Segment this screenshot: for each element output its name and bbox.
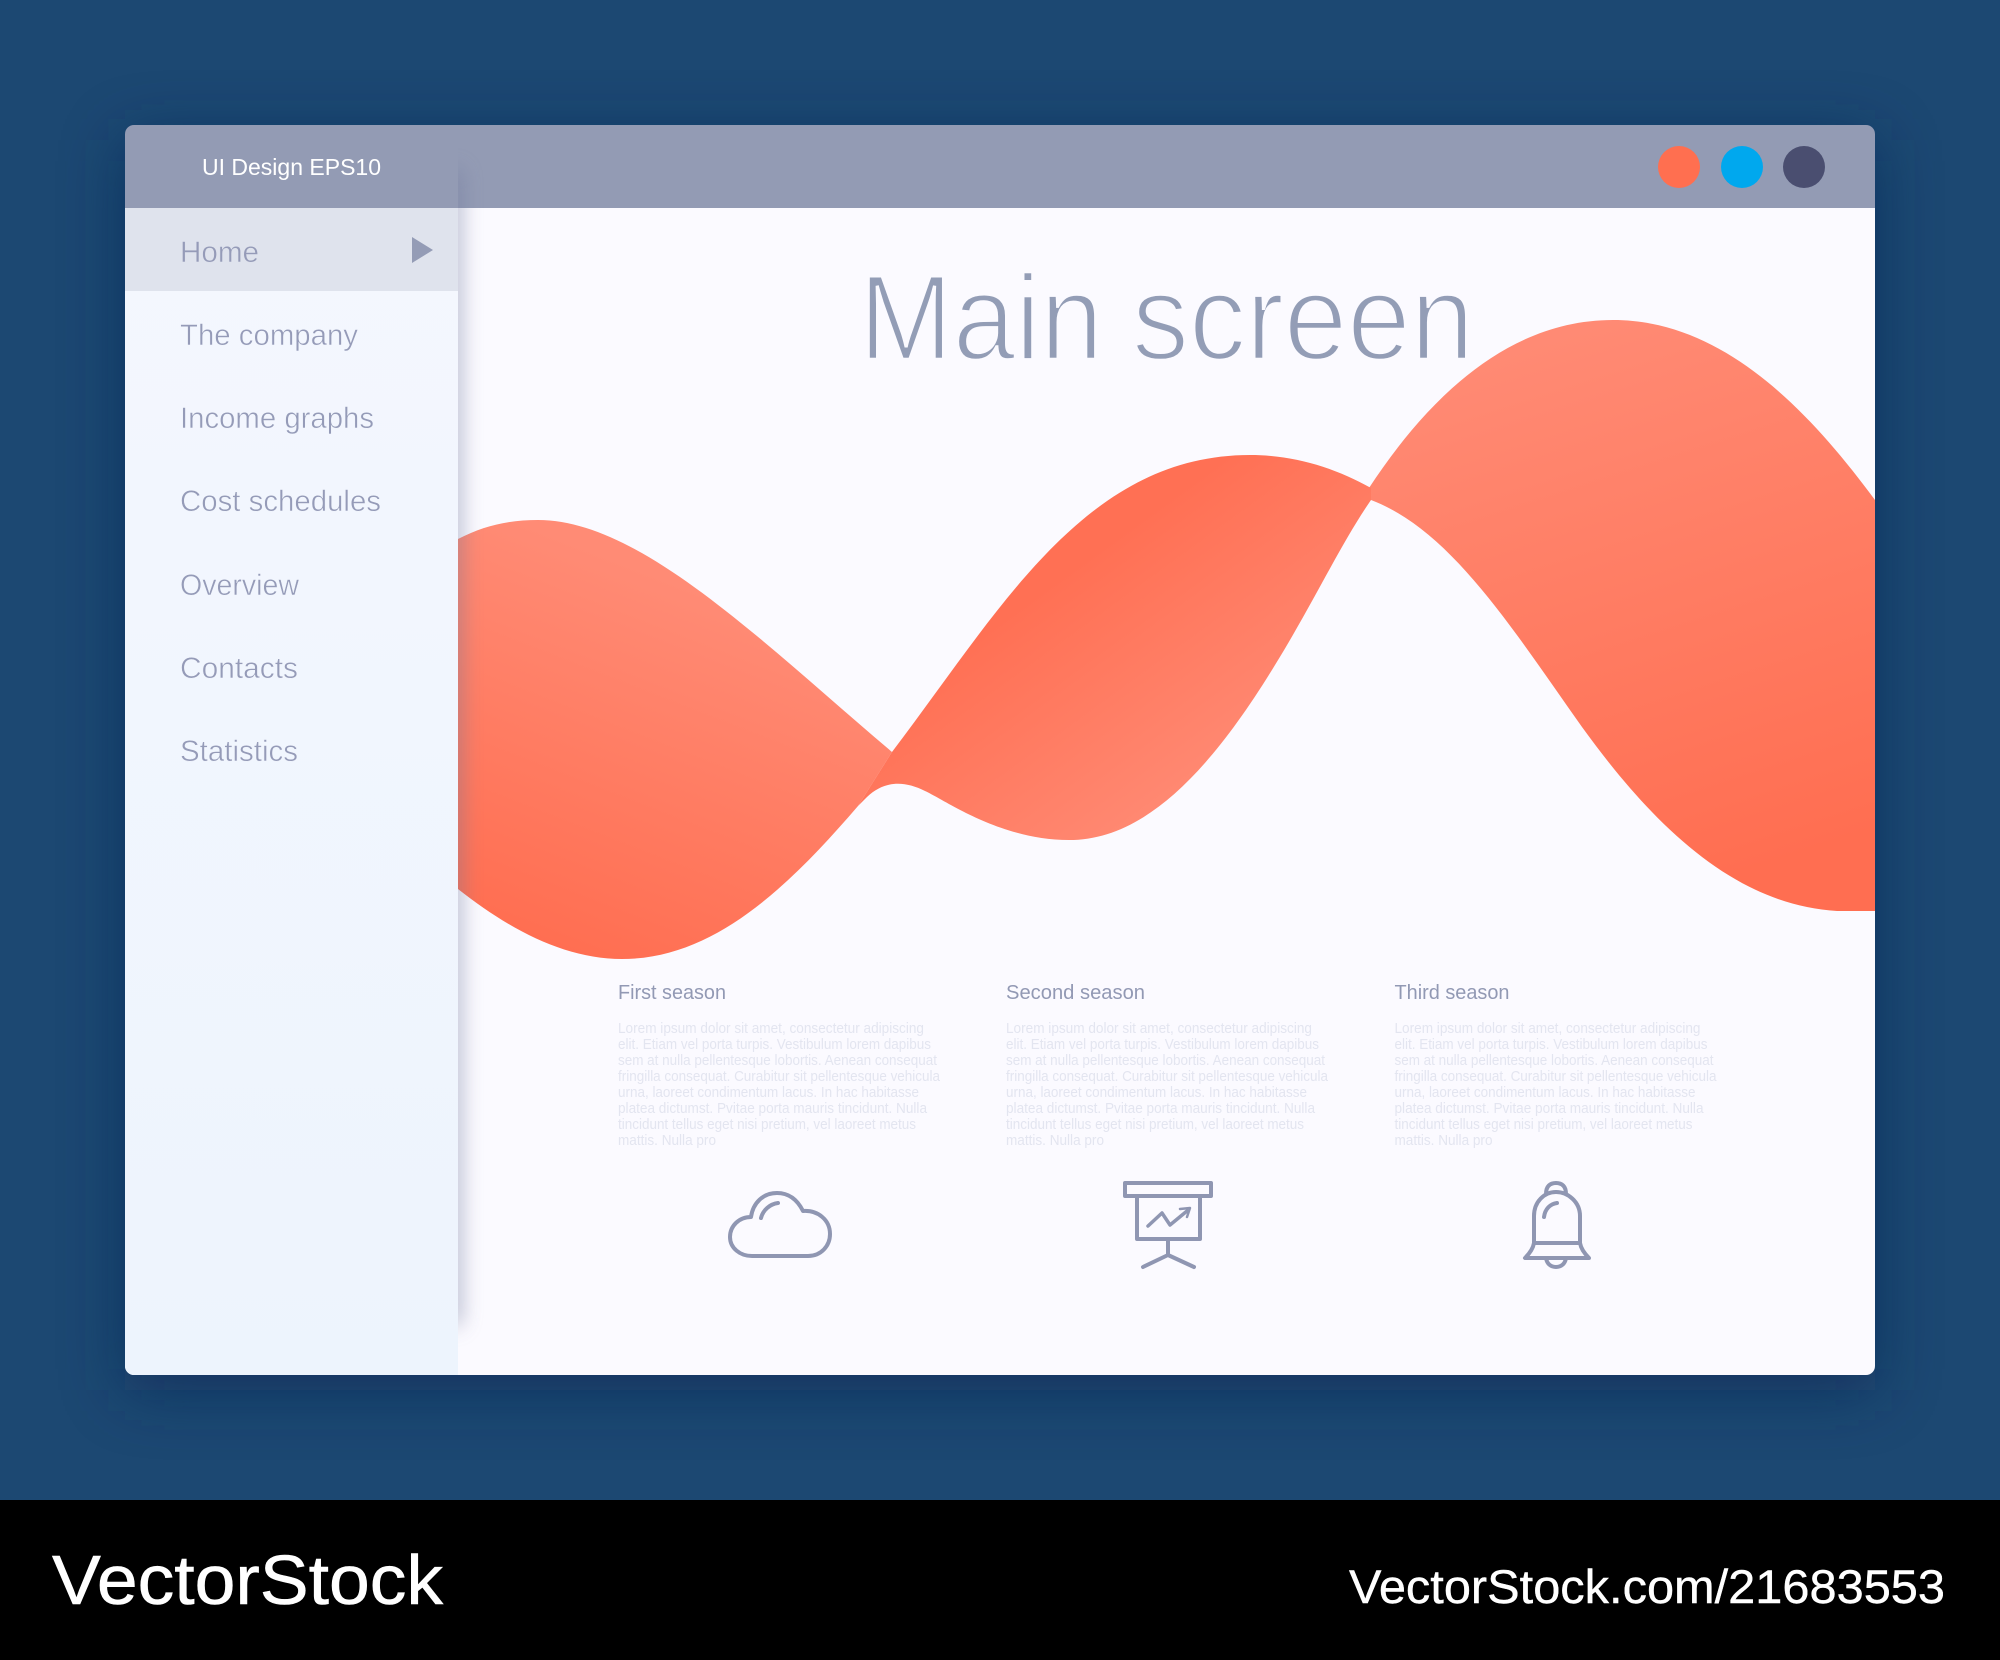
- icon: play arrow: [412, 237, 433, 263]
- body text: platea dictumst. Pvitae porta mauris tincidunt. Nulla: [1394, 1101, 1704, 1117]
- body text: fringilla consequat. Curabitur sit pellentesque vehicula: [1394, 1069, 1717, 1085]
- column: second season: [1006, 981, 1329, 1267]
- window drop shadow: [125, 140, 1875, 1390]
- body text: sem at nulla pellentesque lobortis. Aenean consequat: [1006, 1053, 1325, 1069]
- active menu row: Home: Home: [180, 236, 259, 269]
- main heading: [870, 273, 1465, 359]
- body text: Lorem ipsum dolor sit amet, consectetur adipiscing: [1006, 1021, 1312, 1037]
- body text: mattis. Nulla pro: [1394, 1133, 1492, 1149]
- menu: Contacts: Contacts: [180, 652, 298, 685]
- active menu row: Home: [125, 208, 458, 291]
- dot: navy: [1783, 146, 1825, 188]
- heading: Third season: Third season: [1394, 981, 1510, 1004]
- footer brand: VectorStock: [52, 1541, 444, 1619]
- body text: Lorem ipsum dolor sit amet, consectetur adipiscing: [618, 1021, 924, 1037]
- menu: Cost schedules: Cost schedules: [180, 485, 381, 518]
- menu: Statistics: Statistics: [180, 735, 298, 768]
- column: first season: [618, 981, 941, 1256]
- main content panel: [125, 208, 1875, 1375]
- body text: tincidunt tellus eget nisi pretium, vel laoreet metus: [1006, 1117, 1304, 1133]
- body text: sem at nulla pellentesque lobortis. Aenean consequat: [1394, 1053, 1714, 1069]
- footer bar: [0, 1500, 2000, 1660]
- body text: tincidunt tellus eget nisi pretium, vel laoreet metus: [618, 1117, 916, 1133]
- body text: tincidunt tellus eget nisi pretium, vel laoreet metus: [1394, 1117, 1692, 1133]
- heading: Second season: Second season: [1006, 981, 1145, 1004]
- heading: First season: First season: [618, 981, 726, 1004]
- body text: [618, 1021, 941, 1149]
- wave: third season: [1369, 320, 1875, 911]
- menu: Overview: Overview: [180, 569, 299, 602]
- body text: urna, laoreet condimentum lacus. In hac habitasse: [1006, 1085, 1307, 1101]
- header bar: [125, 125, 1875, 208]
- dot: blue: [1721, 146, 1763, 188]
- sidebar shadow: [446, 170, 460, 1325]
- main heading: Main: [859, 250, 1103, 386]
- body text: sem at nulla pellentesque lobortis. Aenean consequat: [618, 1053, 937, 1069]
- app window: [125, 125, 1875, 1375]
- body text: mattis. Nulla pro: [1006, 1133, 1104, 1149]
- body text: platea dictumst. Pvitae porta mauris tincidunt. Nulla: [618, 1101, 928, 1117]
- footer image reference: VectorStock.com/21683553: [1349, 1560, 1945, 1613]
- body text: [1394, 1021, 1717, 1149]
- main heading: screen: [1132, 250, 1474, 386]
- icon: bell: [1525, 1183, 1589, 1267]
- menu: Income graphs: Income graphs: [180, 402, 374, 435]
- body text: [1006, 1021, 1329, 1149]
- wave: first season: [458, 520, 892, 959]
- body text: mattis. Nulla pro: [618, 1133, 716, 1149]
- body text: fringilla consequat. Curabitur sit pellentesque vehicula: [1006, 1069, 1329, 1085]
- body text: urna, laoreet condimentum lacus. In hac habitasse: [1394, 1085, 1696, 1101]
- wave: second season: [858, 455, 1371, 840]
- sidebar: [125, 208, 458, 1375]
- body text: Lorem ipsum dolor sit amet, consectetur adipiscing: [1394, 1021, 1700, 1037]
- window control dots: [1658, 146, 1825, 188]
- body text: elit. Etiam vel porta turpis. Vestibulum lorem dapibus: [618, 1037, 931, 1053]
- wave chart: [458, 320, 1875, 959]
- body text: fringilla consequat. Curabitur sit pellentesque vehicula: [618, 1069, 941, 1085]
- icon: cloud: [730, 1193, 830, 1256]
- column: third season: [1394, 981, 1717, 1267]
- body text: platea dictumst. Pvitae porta mauris tincidunt. Nulla: [1006, 1101, 1316, 1117]
- dot: orange: [1658, 146, 1700, 188]
- body text: elit. Etiam vel porta turpis. Vestibulum lorem dapibus: [1006, 1037, 1319, 1053]
- header title: UI Design EPS10: [202, 154, 381, 180]
- body text: urna, laoreet condimentum lacus. In hac habitasse: [618, 1085, 919, 1101]
- sidebar background: [125, 378, 458, 1375]
- icon: presentation board with rising chart: [1125, 1183, 1211, 1267]
- body text: elit. Etiam vel porta turpis. Vestibulum lorem dapibus: [1394, 1037, 1708, 1053]
- menu: The company: The company: [180, 319, 358, 352]
